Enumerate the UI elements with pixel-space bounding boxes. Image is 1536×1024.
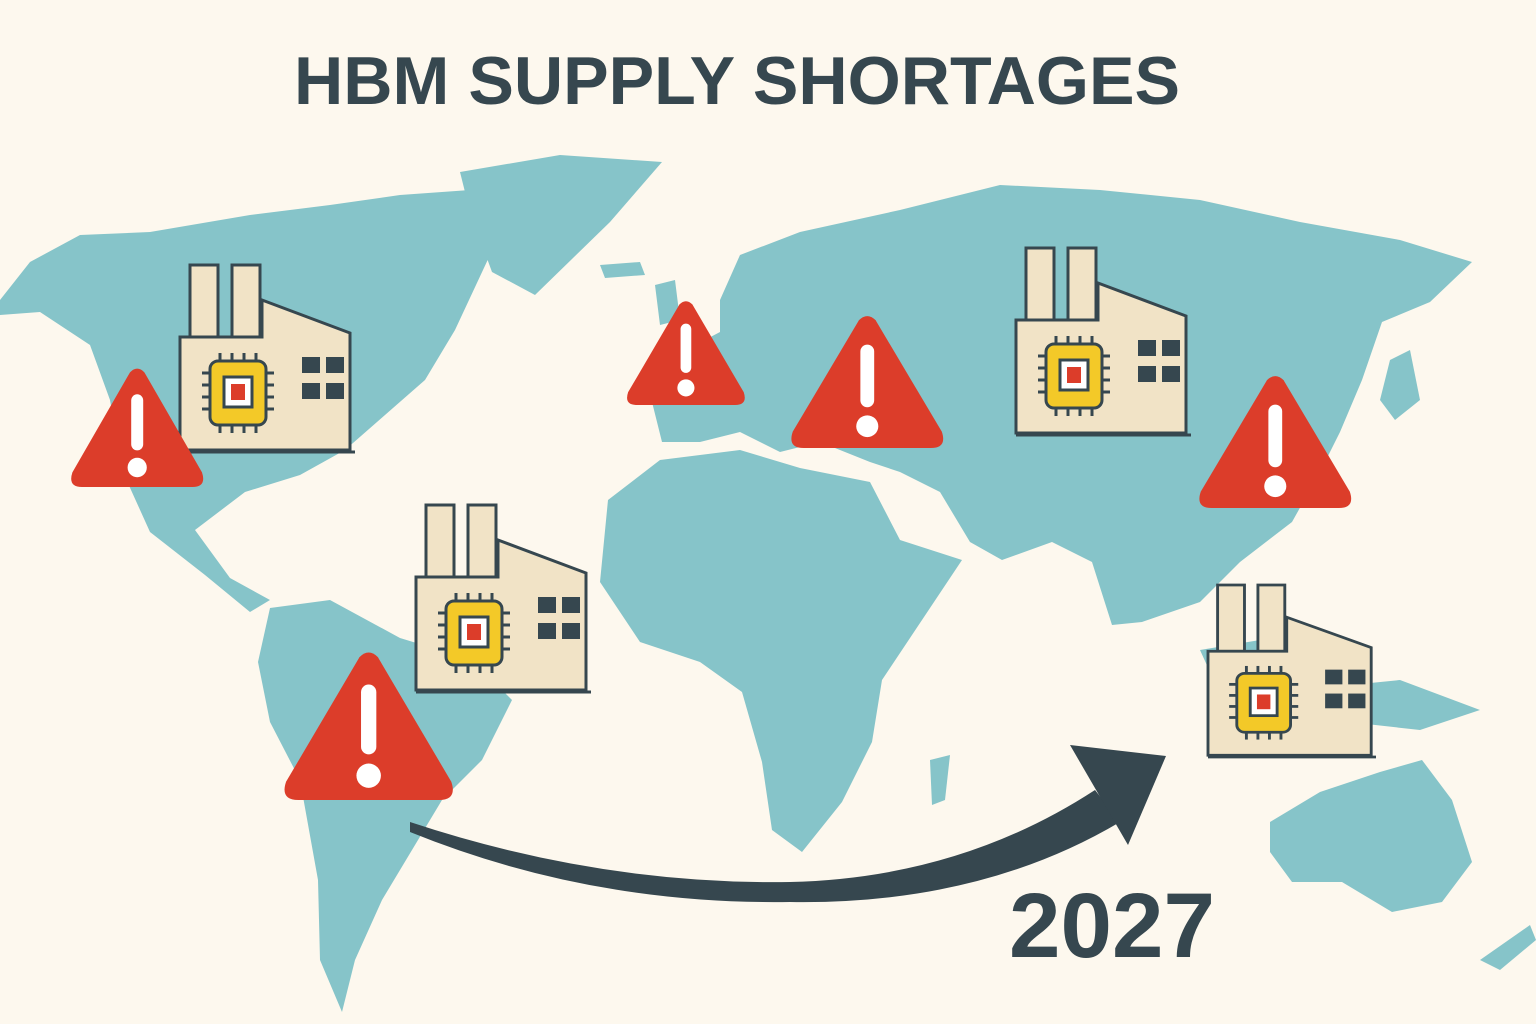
arrow [410,745,1166,902]
warning: North America [71,369,203,487]
warning: Eastern Europe [791,316,943,448]
warning: East Asia [1199,376,1351,508]
year label: 2027 [1009,875,1215,977]
factory: Southeast Asia [1208,585,1376,757]
factory: South America [416,505,591,692]
title: HBM SUPPLY SHORTAGES [294,43,1180,119]
factory: Asia [1016,248,1191,435]
warning: Western Europe [627,301,745,405]
factory: North America [180,265,355,452]
warning: South America [285,653,453,800]
